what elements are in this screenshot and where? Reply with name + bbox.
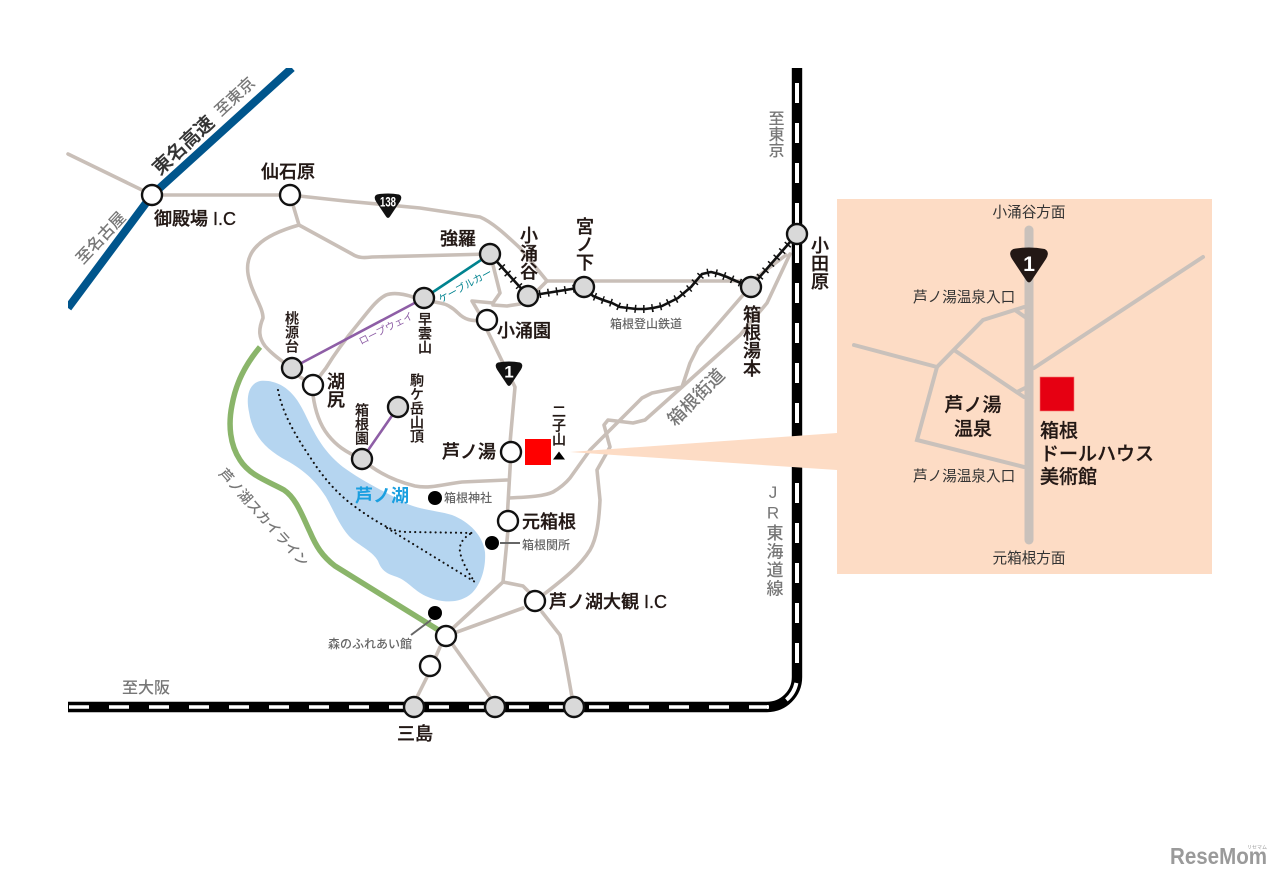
map labels: 宮ノ下 bbox=[574, 217, 594, 271]
inset museum marker bbox=[1040, 377, 1074, 411]
map labels: 至東京 bbox=[211, 74, 259, 120]
map labels: 芦ノ湖スカイライン bbox=[216, 465, 312, 570]
map labels: 箱根園 bbox=[354, 403, 370, 445]
map labels: 桃源台 bbox=[284, 311, 300, 353]
map labels: 東名高速 bbox=[148, 112, 219, 180]
inset labels: 元箱根方面 bbox=[993, 550, 1065, 567]
map labels: 箱根登山鉄道 bbox=[610, 316, 682, 331]
map labels: 至大阪 bbox=[122, 679, 170, 697]
map labels: 強羅 bbox=[440, 229, 476, 249]
ropeway bbox=[292, 298, 424, 459]
inset connector wedge bbox=[570, 433, 837, 470]
Ashinoko Skyline road bbox=[230, 347, 440, 631]
map labels: 三島 bbox=[397, 724, 433, 744]
inset labels bbox=[913, 204, 1154, 567]
lake Ashinoko bbox=[248, 381, 485, 601]
route 138 sign bbox=[375, 194, 401, 218]
map labels: 仙石原 bbox=[261, 162, 315, 182]
map labels: 芦ノ湖 bbox=[355, 486, 409, 506]
map labels: 森のふれあい館 bbox=[328, 636, 412, 651]
map labels: 箱根湯本 bbox=[741, 305, 761, 377]
map labels: 二子山 bbox=[551, 404, 567, 446]
road network bbox=[68, 154, 790, 697]
map labels: 御殿場 I.C bbox=[154, 209, 236, 229]
inset labels: 箱根 bbox=[1040, 420, 1078, 442]
inset panel bbox=[837, 199, 1212, 574]
map labels: 湖尻 bbox=[325, 372, 345, 408]
route 1 sign: 1 bbox=[504, 362, 514, 382]
route 1 sign bbox=[496, 362, 522, 386]
landmark dots bbox=[411, 491, 520, 635]
map labels: 至名古屋 bbox=[73, 209, 130, 268]
map labels: 箱根神社 bbox=[444, 490, 492, 505]
watermark logo: ReseMom bbox=[1170, 843, 1267, 869]
stations bbox=[142, 185, 807, 717]
map labels: 小涌谷 bbox=[518, 226, 538, 280]
inset labels: ドールハウス bbox=[1040, 443, 1154, 465]
map labels: 芦ノ湖大観 I.C bbox=[549, 592, 667, 612]
map labels: 芦ノ湯 bbox=[442, 442, 496, 462]
inset labels: 温泉 bbox=[954, 418, 992, 440]
map labels bbox=[73, 74, 829, 744]
inset side roads bbox=[854, 257, 1203, 467]
inset labels: 芦ノ湯温泉入口 bbox=[913, 468, 1015, 485]
map labels: 早雲山 bbox=[417, 312, 433, 354]
icon: mountain triangle bbox=[553, 452, 565, 460]
route 138 sign: 138 bbox=[380, 194, 396, 210]
watermark logo: リセマム bbox=[1247, 845, 1267, 851]
ferry routes on the lake bbox=[278, 390, 475, 582]
inset labels: 芦ノ湯温泉入口 bbox=[913, 289, 1015, 306]
cable car bbox=[424, 254, 490, 298]
inset route 1 sign bbox=[1010, 248, 1048, 282]
map labels: 至東京 bbox=[766, 110, 784, 158]
museum marker bbox=[525, 439, 551, 465]
inset labels: 芦ノ湯 bbox=[944, 394, 1002, 416]
map labels: 小涌園 bbox=[497, 321, 551, 341]
Hakone Tozan railway bbox=[490, 234, 797, 309]
inset route 1 sign: 1 bbox=[1023, 252, 1035, 276]
inset labels: 美術館 bbox=[1040, 466, 1097, 488]
map labels: 小田原 bbox=[809, 236, 829, 290]
map labels: ロープウェイ bbox=[357, 310, 415, 348]
map labels: 駒ケ岳山頂 bbox=[409, 373, 425, 443]
map labels: 箱根関所 bbox=[522, 537, 570, 552]
JR Tokaido line bbox=[68, 68, 797, 707]
map labels: ケーブルカー bbox=[436, 266, 494, 306]
map labels: JR東海道線 bbox=[764, 483, 783, 598]
map labels: 箱根街道 bbox=[664, 365, 729, 430]
map labels: 元箱根 bbox=[522, 512, 576, 532]
inset labels: 小涌谷方面 bbox=[993, 204, 1065, 221]
Tomei expressway bbox=[68, 68, 292, 308]
inset main road bbox=[1024, 230, 1034, 540]
